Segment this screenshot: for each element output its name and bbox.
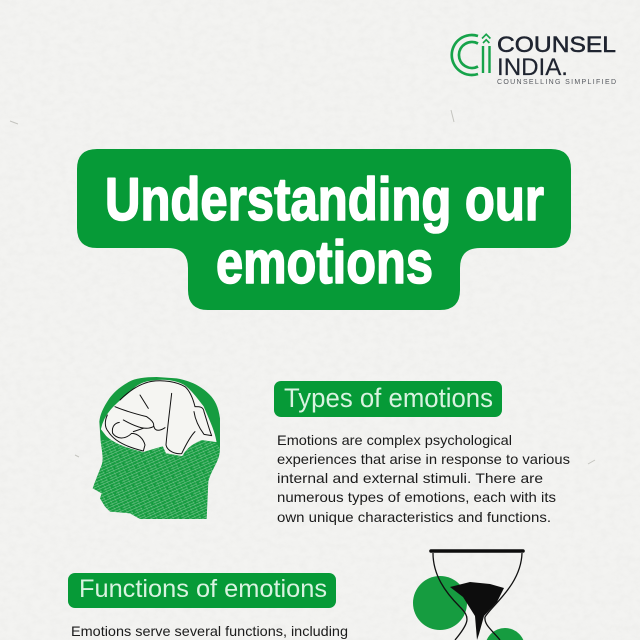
title text: Understanding our [105,166,544,233]
logo wordmark: COUNSEL [497,32,616,57]
scribble texture [93,440,220,519]
text block: types of emotions: numerous types of emotions, each with its [277,490,556,505]
text block: types of emotions [277,433,570,525]
head silhouette [93,377,220,519]
top bar [431,549,523,553]
heading pill: types of emotions: Types of emotions [284,383,493,413]
title text [105,166,544,296]
text block: types of emotions: experiences that arise in response to various [277,452,570,467]
illustration: head with curled figure [93,377,220,519]
heading pill: functions of emotions: Functions of emotions [79,575,327,603]
text block: types of emotions: Emotions are complex psychological [277,433,512,448]
logo [452,32,616,86]
text block: types of emotions: own unique characteristics and functions. [277,510,551,525]
glass outline [433,553,522,640]
text block: types of emotions: internal and external stimuli. There are [277,471,543,486]
icon: logo mark [452,34,490,75]
logo wordmark: INDIA. [497,54,568,81]
illustration: hourglass [413,551,525,640]
sand [450,582,504,640]
text block: functions of emotions: Emotions serve several functions, including [71,624,348,639]
logo wordmark: COUNSELLING SIMPLIFIED [497,79,616,86]
green circles [413,576,525,640]
logo wordmark [497,32,616,86]
curled figure in the brain [102,381,215,455]
title text: emotions [216,229,433,296]
title banner [77,149,571,310]
